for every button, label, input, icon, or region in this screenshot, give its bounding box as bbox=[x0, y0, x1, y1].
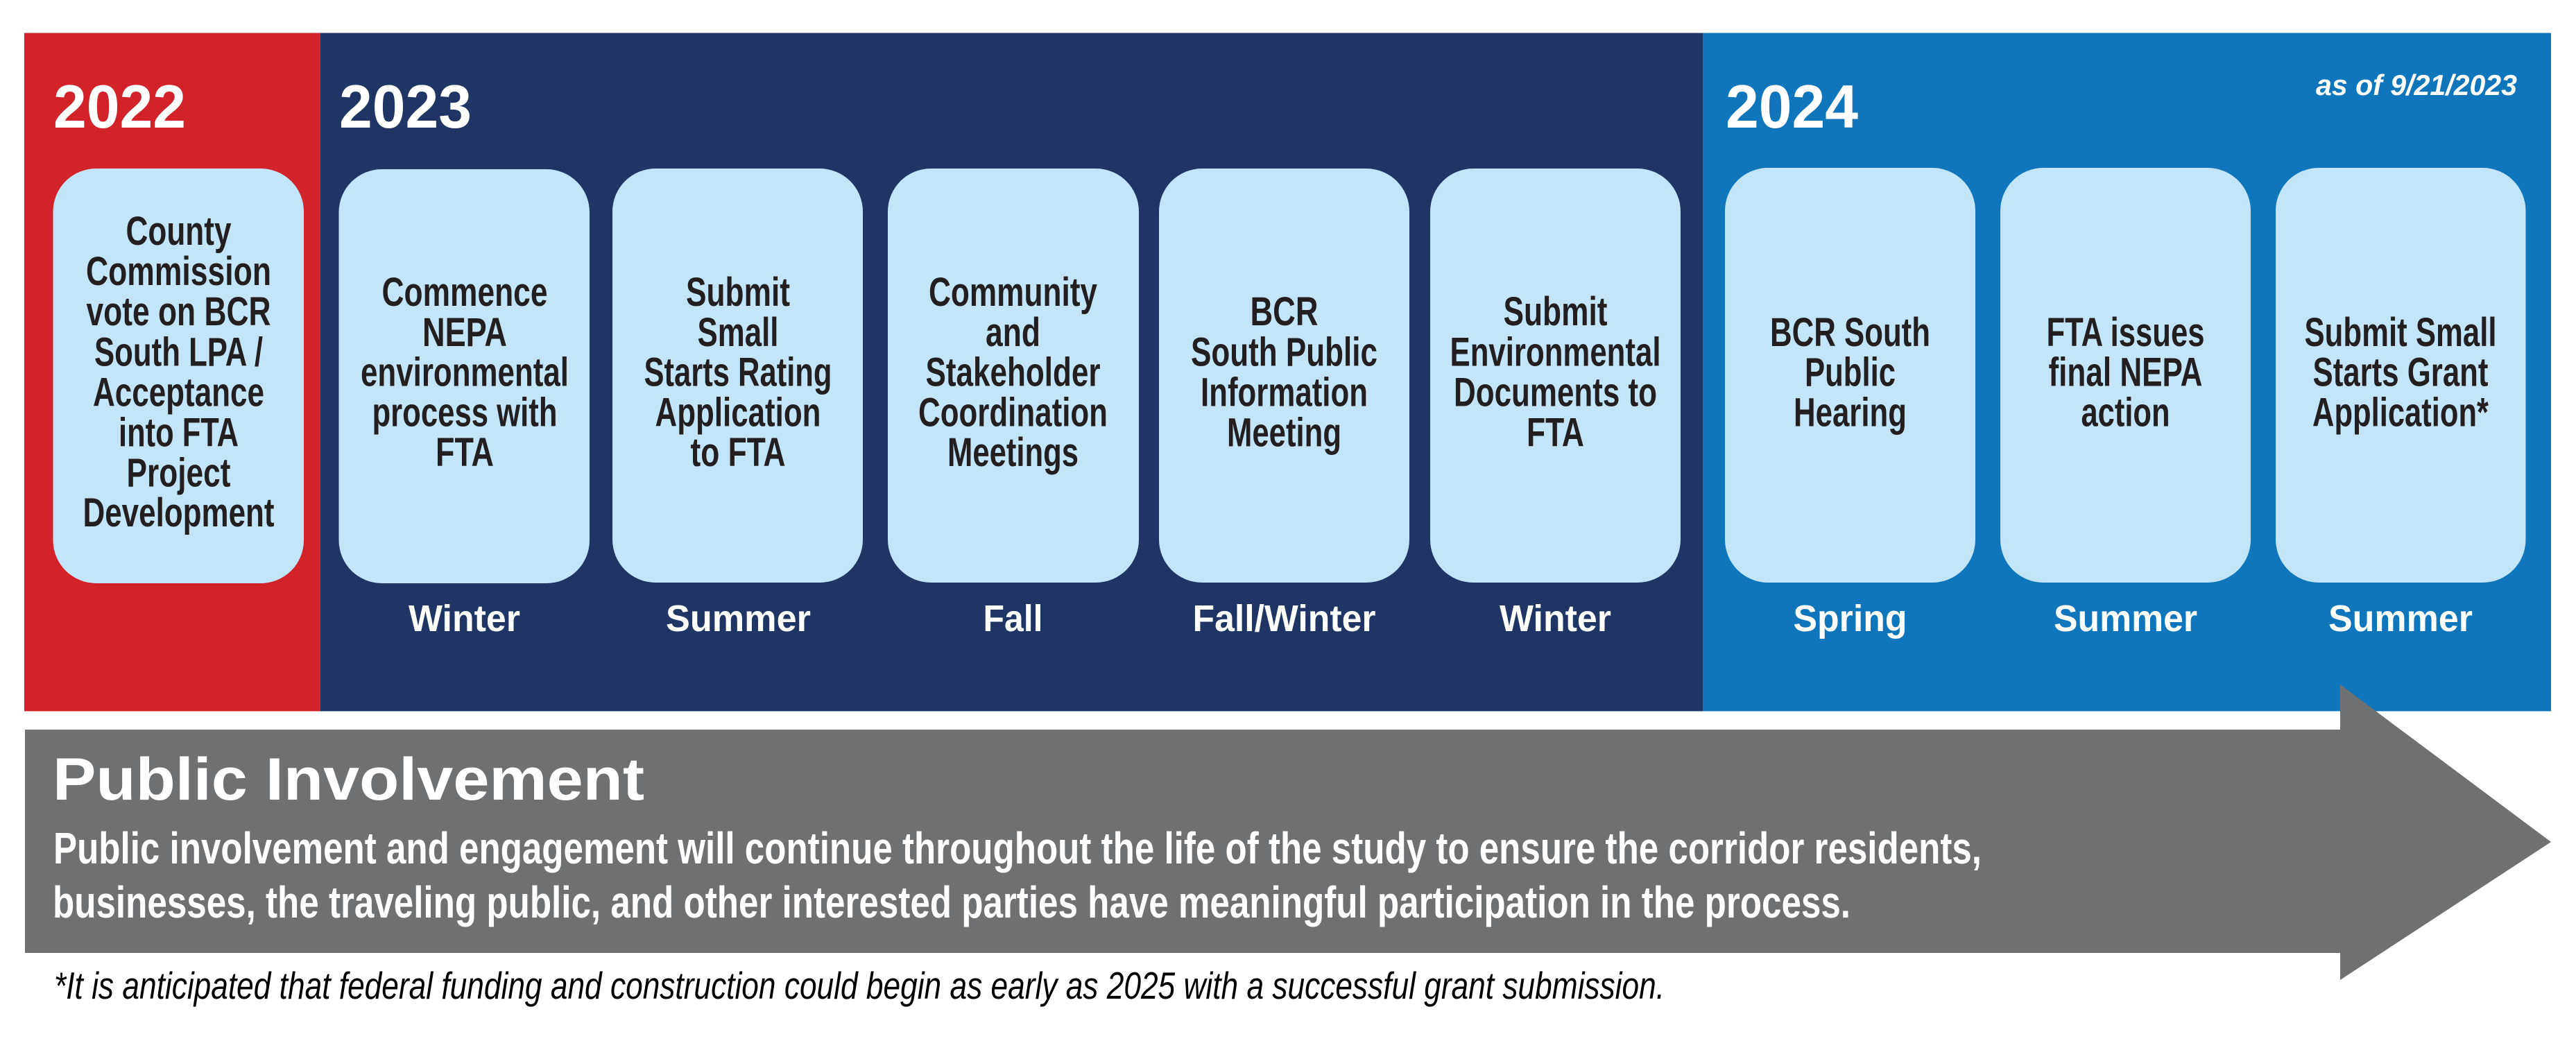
card: BCR South Public Hearing: BCR South bbox=[1770, 310, 1930, 355]
card: Submit Environmental Documents bbox=[1430, 169, 1681, 583]
card: FTA issues final NEPA action: action bbox=[2081, 390, 2170, 436]
card: Commence NEPA: NEPA bbox=[422, 310, 507, 355]
heading: 2024: 2024 bbox=[1726, 72, 1858, 141]
season: Summer: Summer bbox=[666, 598, 811, 639]
season: Fall: Fall bbox=[984, 598, 1043, 639]
card: Submit Environmental Documents: FTA bbox=[1527, 411, 1584, 455]
card: County Commission vote: into FTA bbox=[119, 411, 239, 455]
season: Fall/Winter: Fall/Winter bbox=[1193, 598, 1376, 639]
card: Submit Small Starts Grant Application bbox=[2276, 168, 2526, 583]
card: Submit Small Starts Grant Application: Application* bbox=[2312, 390, 2489, 436]
card: BCR South Public Information Meeting: South Public bbox=[1191, 330, 1377, 375]
card: BCR South Public Information Meeting: Information bbox=[1201, 370, 1368, 415]
card: BCR South Public Information Meeting: BCR bbox=[1250, 289, 1318, 334]
season: Summer: Summer bbox=[2054, 598, 2197, 639]
arrow: Public Involvement bbox=[25, 685, 2551, 980]
footnote: *It is anticipated that federal funding and construction could begin as early as 2025 with a successful grant submission. bbox=[54, 964, 1665, 1007]
body text: public involvement description bbox=[53, 823, 1982, 927]
heading: Public Involvement: Public Involvement bbox=[53, 746, 644, 813]
body text: public involvement description: businesses, the traveling public, and other interested parties have meaningful participation in the process. bbox=[53, 877, 1851, 927]
body text: public involvement description: Public involvement and engagement will continue throughout the life of the study to ensure the corridor residents, bbox=[53, 823, 1982, 873]
card: Submit Small Starts Rating: Small bbox=[698, 310, 778, 355]
card: Commence NEPA: process with bbox=[372, 390, 558, 436]
card: BCR South Public Hearing: Hearing bbox=[1794, 390, 1907, 436]
card: Submit Small Starts Rating: Application bbox=[655, 390, 821, 436]
card: County Commission vote: Development bbox=[83, 490, 275, 535]
card: Submit Small Starts Rating: to FTA bbox=[691, 430, 785, 475]
heading: 2022: 2022 bbox=[53, 72, 186, 141]
card: County Commission vote: South LPA / bbox=[94, 330, 263, 375]
card: Commence NEPA: Commence bbox=[381, 270, 548, 315]
card: Commence NEPA: FTA bbox=[436, 430, 494, 475]
season: Winter: Winter bbox=[1500, 598, 1611, 639]
card: County Commission vote: vote on BCR bbox=[86, 289, 271, 334]
heading: 2023: 2023 bbox=[339, 72, 472, 141]
card: Community and Stakeholder bbox=[888, 169, 1139, 583]
card: County Commission vote: Acceptance bbox=[93, 370, 264, 415]
card: BCR South Public Hearing: Public bbox=[1805, 350, 1896, 395]
panel: 2024 bbox=[1703, 33, 2551, 712]
card: Community and Stakeholder: and bbox=[986, 310, 1040, 355]
card: Submit Small Starts Rating: Starts Rating bbox=[644, 350, 832, 395]
card: FTA issues final NEPA action bbox=[2000, 168, 2251, 583]
card: Submit Small Starts Rating: Submit bbox=[686, 270, 790, 315]
card: County Commission vote: Project bbox=[126, 451, 230, 495]
card: County Commission vote: Commission bbox=[86, 249, 271, 294]
card: FTA issues final NEPA action: FTA issues bbox=[2046, 310, 2204, 355]
card: Community and Stakeholder: Coordination bbox=[918, 390, 1108, 436]
card: BCR South Public Information Meeting bbox=[1159, 169, 1409, 583]
season: Winter: Winter bbox=[409, 598, 520, 639]
card: Community and Stakeholder: Stakeholder bbox=[925, 350, 1100, 395]
card: Submit Environmental Documents: Submit bbox=[1504, 289, 1608, 334]
card: FTA issues final NEPA action: final NEPA bbox=[2049, 350, 2203, 395]
date note: as of 9/21/2023: as of 9/21/2023 bbox=[2316, 69, 2517, 101]
card: Submit Small Starts Grant Application: Submit Small bbox=[2304, 310, 2497, 355]
season: Spring: Spring bbox=[1794, 598, 1907, 639]
card: Commence NEPA bbox=[338, 169, 590, 583]
card: County Commission vote: County bbox=[126, 209, 232, 254]
card: Submit Environmental Documents: Environmental bbox=[1450, 330, 1660, 375]
panel: 2022 bbox=[24, 33, 320, 712]
card: County Commission vote bbox=[53, 169, 304, 583]
season: Summer: Summer bbox=[2328, 598, 2473, 639]
card: Submit Small Starts Grant Application: Starts Grant bbox=[2312, 350, 2489, 395]
card: BCR South Public Hearing bbox=[1725, 168, 1975, 583]
panel: 2023 bbox=[320, 33, 1703, 712]
card: Community and Stakeholder: Community bbox=[929, 270, 1097, 315]
card: Submit Small Starts Rating bbox=[612, 169, 863, 583]
card: BCR South Public Information Meeting: Meeting bbox=[1227, 411, 1341, 455]
card: Submit Environmental Documents: Documents to bbox=[1454, 370, 1657, 415]
card: Community and Stakeholder: Meetings bbox=[947, 430, 1079, 475]
card: Commence NEPA: environmental bbox=[361, 350, 569, 395]
